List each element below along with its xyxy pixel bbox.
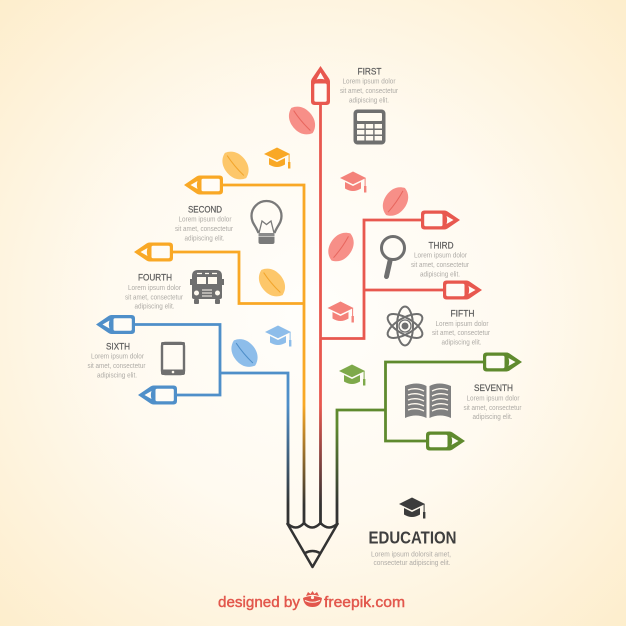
text block: first xyxy=(340,66,399,104)
text block: first: adipiscing elit. xyxy=(349,98,389,104)
text block: fourth: Lorem ipsum dolor xyxy=(128,285,182,292)
text block: third: sit amet, consectetur xyxy=(411,262,470,269)
pencil: seventh upper xyxy=(483,352,522,372)
leaf: yellow 2 xyxy=(253,263,291,302)
text block: second: Lorem ipsum dolor xyxy=(178,216,232,224)
pencil: seventh lower xyxy=(426,432,465,450)
text block: seventh: Lorem ipsum dolor xyxy=(466,396,520,402)
leaf: red 1 xyxy=(283,101,321,140)
leaf: red 2 xyxy=(377,182,414,221)
red branch xyxy=(319,405,322,525)
text block: education description: Lorem ipsum dolorsit amet, xyxy=(371,552,451,558)
icon: open book xyxy=(405,384,451,418)
pencil: second xyxy=(184,176,223,194)
text block: fifth: FIFTH xyxy=(450,308,475,320)
text block: fourth: adipiscing elit. xyxy=(134,304,175,310)
graduation cap: red lower xyxy=(328,302,354,322)
text block: first: FIRST xyxy=(358,66,382,78)
text block: sixth: adipiscing elit. xyxy=(97,372,137,380)
icon: light bulb xyxy=(252,201,282,244)
text block: seventh: sit amet, consectetur xyxy=(464,405,522,412)
pencil: fifth xyxy=(443,280,482,300)
text block: first: sit amet, consectetur xyxy=(340,88,399,95)
leaf: yellow 1 xyxy=(216,146,255,185)
footer credit: freepik.com xyxy=(324,594,405,611)
pencil: fourth xyxy=(134,242,173,262)
text block: fourth: sit amet, consectetur xyxy=(125,294,184,302)
text block: seventh: SEVENTH xyxy=(474,383,513,394)
pencil tree trunk and branches xyxy=(135,103,483,525)
title: education: EDUCATION xyxy=(368,528,456,548)
graduation cap: red upper xyxy=(340,172,366,192)
pencil: third xyxy=(421,210,460,230)
text block: sixth xyxy=(88,342,146,380)
text block: sixth: sit amet, consectetur xyxy=(88,363,146,370)
text block: fifth: Lorem ipsum dolor xyxy=(436,321,489,328)
graduation cap: dark xyxy=(399,498,425,518)
text block: seventh: adipiscing elit. xyxy=(472,414,513,421)
yellow branch xyxy=(303,405,305,525)
leaf: red 3 xyxy=(323,227,359,267)
text block: fourth xyxy=(125,272,184,310)
graduation cap: yellow xyxy=(264,148,290,168)
text block: third: adipiscing elit. xyxy=(420,272,460,278)
leaf: blue xyxy=(225,333,264,373)
icon: atom xyxy=(384,306,426,346)
graduation cap: blue xyxy=(265,326,291,346)
text block: education description xyxy=(371,552,451,567)
icon: magnifying glass xyxy=(382,236,404,276)
text block: fifth: sit amet, consectetur xyxy=(432,330,491,337)
text block: first: Lorem ipsum dolor xyxy=(342,78,396,86)
footer credit xyxy=(218,591,405,611)
text block: fourth: FOURTH xyxy=(138,272,172,284)
graduation cap: green xyxy=(339,364,365,386)
icon: calculator xyxy=(354,110,386,144)
text block: education description: consectetur adipiscing elit. xyxy=(374,560,451,567)
text block: second: adipiscing elit. xyxy=(184,236,225,242)
footer credit: designed by xyxy=(218,594,300,611)
pencil: sixth lower xyxy=(138,386,177,404)
icon: tablet xyxy=(161,342,185,375)
text block: fifth xyxy=(432,308,491,346)
text block: second xyxy=(175,204,234,242)
text block: sixth: Lorem ipsum dolor xyxy=(91,354,145,360)
text block: third xyxy=(411,240,470,278)
text block: fifth: adipiscing elit. xyxy=(442,340,482,346)
pencil: sixth upper xyxy=(96,315,135,334)
text block: sixth: SIXTH xyxy=(106,342,130,352)
blue branch xyxy=(287,405,289,525)
text block: second: SECOND xyxy=(188,204,222,216)
text block: seventh xyxy=(464,383,522,421)
green branch xyxy=(336,425,338,525)
text block: third: Lorem ipsum dolor xyxy=(414,252,468,260)
icon: freepik logo xyxy=(303,591,322,607)
icon: school bus xyxy=(190,270,224,304)
pencil tip at bottom xyxy=(287,523,338,567)
text block: second: sit amet, consectetur xyxy=(175,226,234,233)
text block: third: THIRD xyxy=(428,240,454,252)
pencil: first xyxy=(311,66,330,105)
